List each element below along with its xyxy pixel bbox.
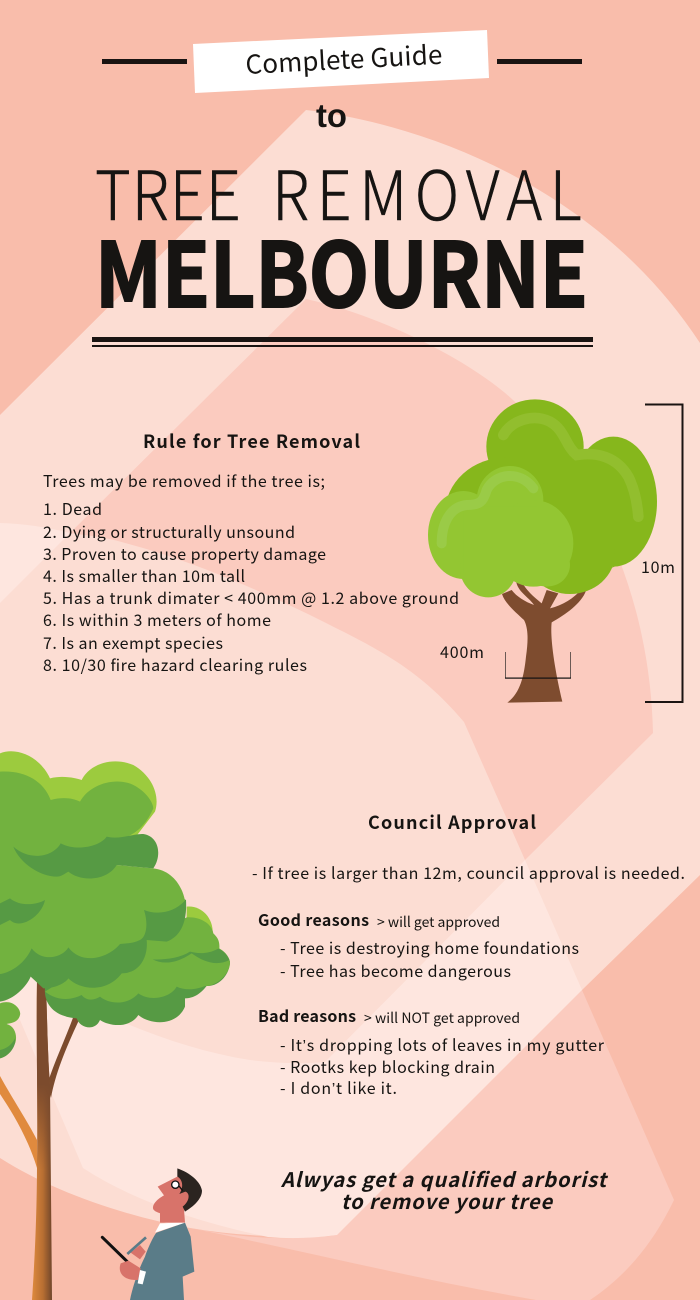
illustration: man with clipboard: [102, 1168, 202, 1300]
cuff: [138, 1270, 146, 1284]
title double rule: [92, 337, 593, 347]
bad reasons: > will NOT get approved: [364, 1008, 520, 1028]
good reasons: [258, 907, 579, 982]
illustration: measured tree: [428, 399, 682, 703]
white tag with text: [193, 30, 489, 93]
large tree trunk: [0, 980, 79, 1300]
rule list: [43, 496, 459, 676]
pen: [127, 1237, 146, 1254]
rule list: 2. Dying or structurally unsound: [43, 519, 295, 543]
title: tree removal: [95, 141, 582, 240]
size requirement: - If tree is larger than 12m, council approval is needed.: [252, 860, 685, 884]
rule list: 1. Dead: [43, 496, 102, 520]
callout: qualified arborist: Alwyas get a qualified arborist: [280, 1164, 609, 1193]
good reasons: > will get approved: [377, 912, 500, 932]
heading: Rule for Tree Removal: [143, 428, 360, 454]
head and neck: [153, 1177, 193, 1223]
callout: qualified arborist: to remove your tree: [341, 1186, 554, 1215]
bad reasons: [258, 1003, 605, 1099]
400m trunk measure: 400m: [440, 639, 484, 663]
rule list: 5. Has a trunk dimater < 400mm @ 1.2 above ground: [43, 585, 459, 609]
rule list: 3. Proven to cause property damage: [43, 541, 326, 565]
intro text: Trees may be removed if the tree is;: [43, 468, 325, 492]
heading: Council Approval: [368, 809, 536, 835]
good reasons: Good reasons: [258, 907, 369, 931]
title: tree removal: TREE: [95, 141, 241, 240]
tree trunk: [502, 581, 586, 703]
left rule: [102, 59, 187, 64]
rule list: 6. Is within 3 meters of home: [43, 607, 271, 631]
suit: [130, 1223, 194, 1300]
rule list: 8. 10/30 fire hazard clearing rules: [43, 652, 307, 676]
illustration: large tree: [0, 751, 230, 1300]
10m height bracket: [641, 404, 682, 702]
collar: [155, 1223, 185, 1233]
bad reasons: - It’s dropping lots of leaves in my gutter: [280, 1032, 605, 1056]
hands: [120, 1245, 146, 1280]
white tag with text: Complete Guide: [244, 35, 443, 82]
good reasons: - Tree is destroying home foundations: [280, 935, 579, 959]
glasses: [172, 1181, 183, 1191]
tree canopy: [428, 399, 657, 597]
panel: council approval: [252, 809, 685, 1099]
large tree canopy: [0, 751, 230, 1058]
callout: qualified arborist: [280, 1164, 609, 1215]
right rule: [497, 59, 582, 64]
title: to: to: [316, 97, 347, 134]
hair: [177, 1168, 202, 1212]
bad reasons: Bad reasons: [258, 1003, 356, 1027]
title: melbourne: MELBOURNE: [95, 204, 588, 333]
rule list: 7. Is an exempt species: [43, 630, 223, 654]
10m height bracket: 10m: [641, 554, 675, 578]
400m trunk measure: [440, 639, 571, 679]
title: tree removal: REMOVAL: [272, 141, 582, 240]
bad reasons: - Rootks kep blocking drain: [280, 1054, 495, 1078]
clipboard: [102, 1237, 129, 1263]
rule list: 4. Is smaller than 10m tall: [43, 563, 245, 587]
title: complete guide tag: [102, 30, 582, 93]
good reasons: - Tree has become dangerous: [280, 958, 511, 982]
panel: rule for tree removal: [43, 428, 459, 676]
bad reasons: - I don’t like it.: [280, 1075, 397, 1099]
